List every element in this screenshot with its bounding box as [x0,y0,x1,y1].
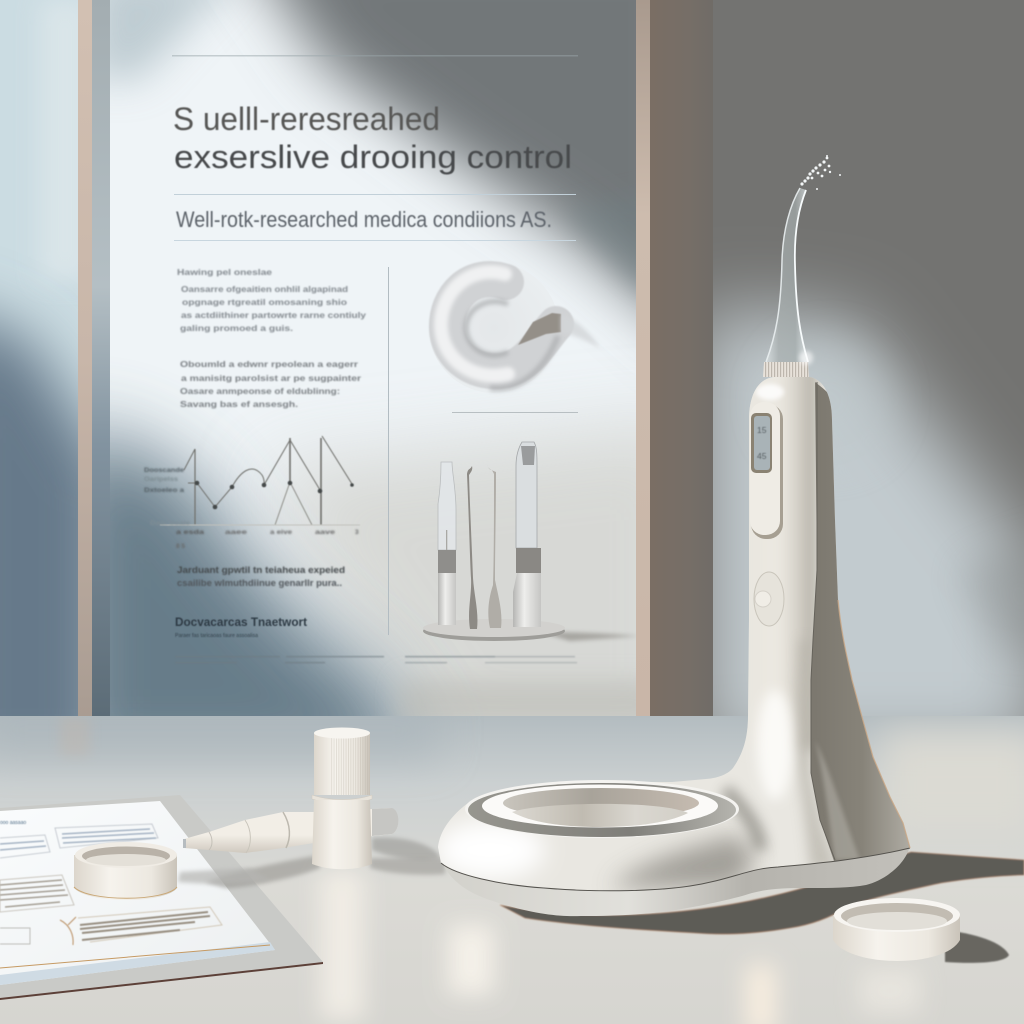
line chart: a eive [270,529,292,536]
device display panel: 15 [757,425,767,435]
applicator pen [183,808,398,853]
text block: overview: opgnage rtgreatil omosaning shio [182,297,347,307]
wall background right with diagonal light [650,0,1024,760]
wall background left [0,0,78,716]
device collar [763,362,809,377]
poster title: exserslive drooing control [174,139,572,175]
line chart: 8 5 [176,543,185,550]
poster subtitle: Well-rotk-researched medica condiions AS. [176,207,552,232]
shadows on table [178,838,445,884]
text block: chart note [177,565,345,588]
device round button [754,572,784,626]
line chart: Dooscande [144,467,184,474]
poster dividers [174,194,578,635]
poster panel [110,0,636,716]
text block: overview: as actdiithiner partowrte rarne contiuly [181,310,366,320]
text block: details: Oboumld a edwnr rpeolean a eagerr [180,359,359,369]
text block: chart note: csailibe wlmuthdiinue genarllr pura.. [177,578,342,588]
text block: overview: Hawing pel oneslae [177,268,273,277]
poster title: S uelll-reresreahed [173,101,440,137]
oral irrigator device [430,155,930,916]
line chart: aave [315,529,336,536]
poster frame right [636,0,650,717]
line chart: Dxtoeleo a [144,487,184,494]
line chart: Dau: ooale [150,520,190,527]
device lower lip [441,846,910,916]
text block: overview [177,268,366,333]
text block: details: Savang bas ef ansesgh. [180,399,298,409]
line chart: 3 [355,529,359,536]
icon: swirl device [429,263,600,393]
small ring on document [74,842,177,900]
table surface [0,700,1024,1024]
text block: overview: Oansarre ofgeaitien onhlil algapinad [181,284,348,294]
line chart [144,436,360,550]
text block: chart note: Jarduant gpwtil tn teiaheua expeied [177,565,345,575]
line chart: a esda [176,529,205,536]
text block: details: a manisitg parolsist ar pe sugpainter [181,373,362,383]
text block: details: Oasare anmpeonse of eldublinng: [180,386,340,396]
text block: details [180,359,362,409]
poster top rule [172,55,578,56]
pen shadow over document [205,855,320,888]
text block: overview: galing promoed a guis. [180,323,293,333]
line chart: Oaripelss [144,476,178,483]
device nozzle [766,188,813,365]
instruments illustration [423,442,640,641]
poster frame left [78,0,110,717]
line chart: aaee [225,529,248,536]
bottle [312,728,372,869]
document text blocks [0,820,222,945]
device bowl ring [465,780,739,838]
device display panel [750,402,783,539]
document text blocks: ooo aasaao [0,820,26,826]
text block: document footer [175,617,577,663]
small ring on table [833,898,1009,963]
device shadow [500,852,1024,934]
text block: document footer: Docvacarcas Tnaetwort [175,617,307,629]
text block: document footer: Paraer fas taricaoas faure assoalisa [175,633,259,639]
device display panel: 45 [757,451,767,461]
water spray [800,155,841,190]
device base and tower [438,377,910,890]
poster title [173,101,572,175]
document on table [0,795,323,1000]
